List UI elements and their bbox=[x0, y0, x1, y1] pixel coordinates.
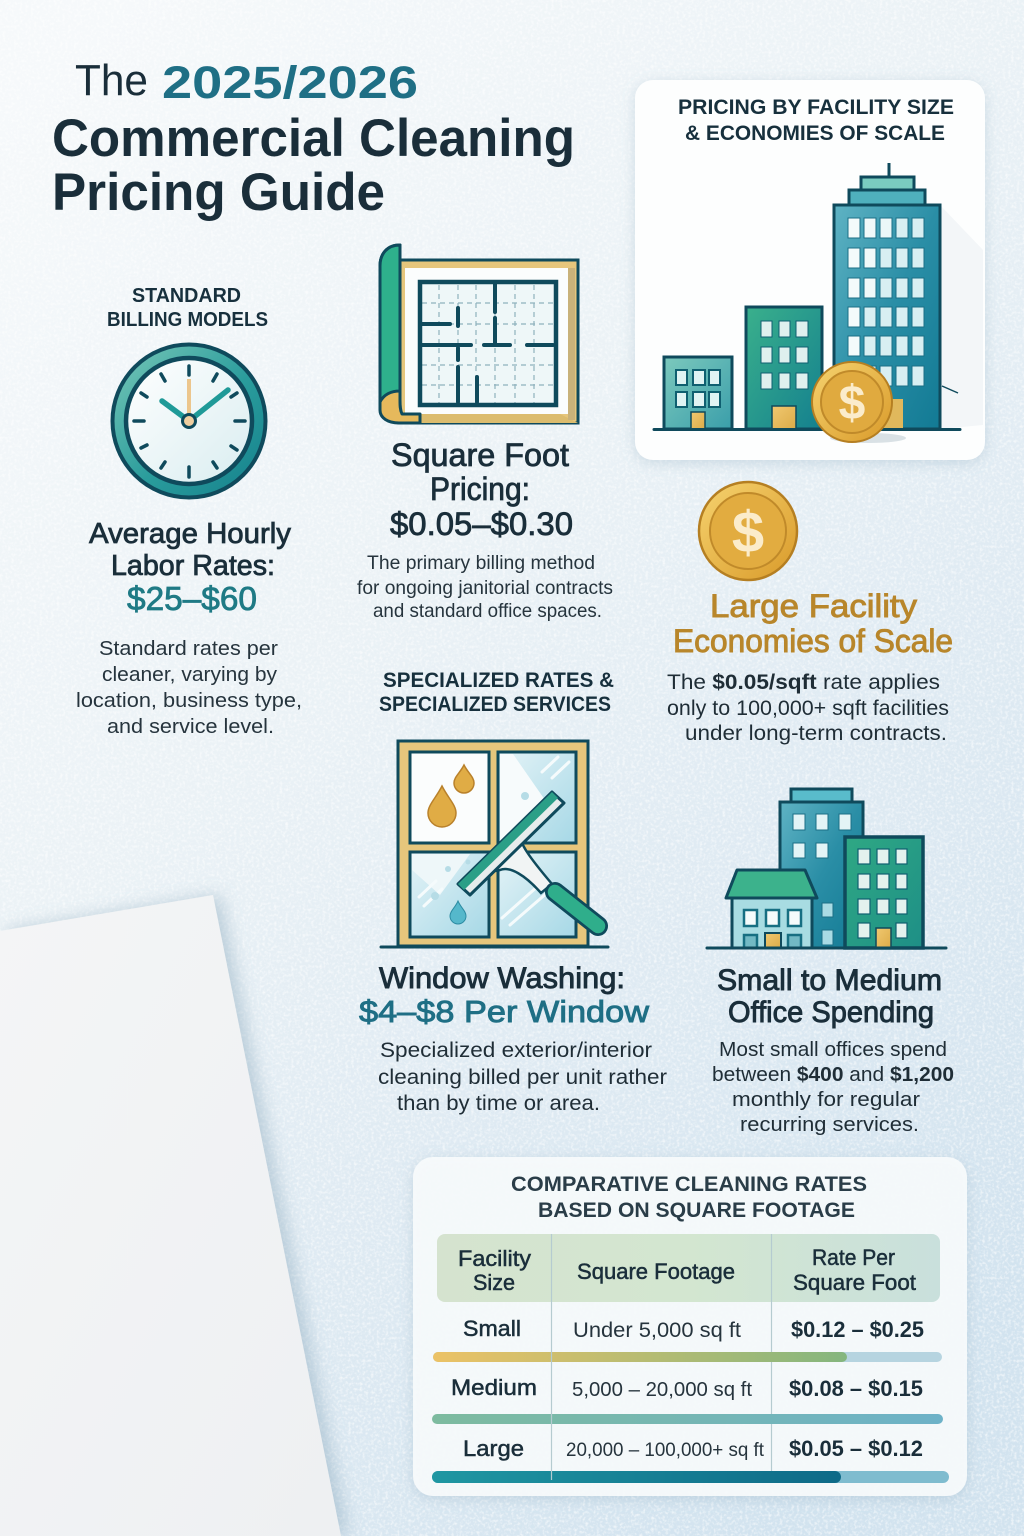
text block: window description: Specialized exterior/interior bbox=[380, 1038, 652, 1062]
heading: specialized rates: SPECIALIZED RATES & bbox=[383, 669, 614, 692]
icon: window and squeegee bbox=[381, 741, 608, 947]
heading: standard billing models bbox=[107, 285, 268, 331]
heading: comparative rates: COMPARATIVE CLEANING RATES bbox=[511, 1172, 867, 1196]
row: medium: 5,000 – 20,000 sq ft bbox=[572, 1379, 752, 1401]
text block: office description: monthly for regular bbox=[732, 1088, 920, 1111]
heading: hourly labor rates: Average Hourly bbox=[89, 518, 291, 550]
heading: facility size bbox=[678, 96, 954, 145]
heading: facility size: & ECONOMIES OF SCALE bbox=[685, 122, 945, 145]
text block: hourly description: location, business type, bbox=[76, 689, 302, 712]
row: medium bbox=[451, 1375, 923, 1401]
heading: hourly labor rates: $25–$60 bbox=[127, 580, 257, 617]
text block: hourly description: cleaner, varying by bbox=[102, 663, 278, 686]
icon: clock bbox=[112, 344, 266, 498]
text block: hourly description: and service level. bbox=[107, 715, 274, 738]
title bbox=[52, 56, 575, 222]
title: The bbox=[75, 56, 148, 105]
heading: specialized rates bbox=[379, 669, 614, 716]
heading: square foot pricing bbox=[390, 437, 573, 542]
panel: square foot pricing bbox=[357, 245, 613, 622]
row: small: $0.12 – $0.25 bbox=[791, 1317, 924, 1342]
row: large: $0.05 – $0.12 bbox=[789, 1436, 923, 1461]
heading: large facility economies of scale: Economies of Scale bbox=[673, 623, 953, 659]
table header: Facility bbox=[458, 1246, 531, 1271]
row bars bbox=[432, 1352, 949, 1483]
heading: square foot pricing: $0.05–$0.30 bbox=[390, 506, 573, 542]
heading: office spending: Small to Medium bbox=[717, 964, 942, 997]
row: medium: Medium bbox=[451, 1375, 537, 1400]
table header: Square Footage bbox=[577, 1259, 735, 1284]
heading: window washing bbox=[359, 962, 650, 1029]
panel: small to medium office spending bbox=[707, 789, 954, 1136]
icon: office buildings bbox=[707, 789, 946, 948]
text block: square foot description: and standard office spaces. bbox=[373, 600, 602, 622]
text block: economies description: The $0.05/sqft rate applies bbox=[667, 670, 940, 694]
row: medium: $0.08 – $0.15 bbox=[789, 1376, 923, 1401]
icon: buildings with coin bbox=[654, 163, 983, 443]
panel: comparison table bbox=[413, 1157, 967, 1496]
table header bbox=[437, 1234, 940, 1302]
heading: standard billing models: BILLING MODELS bbox=[107, 309, 268, 331]
text block: window description: cleaning billed per unit rather bbox=[378, 1065, 667, 1089]
panel: pricing by facility size bbox=[635, 80, 985, 460]
text block: office description: recurring services. bbox=[740, 1113, 919, 1136]
text block: economies description: only to 100,000+ sqft facilities bbox=[667, 696, 949, 720]
title: Pricing Guide bbox=[52, 163, 385, 222]
text block: hourly description bbox=[76, 637, 302, 738]
heading: square foot pricing: Square Foot bbox=[391, 437, 569, 473]
title: Commercial Cleaning bbox=[52, 109, 575, 168]
heading: hourly labor rates: Labor Rates: bbox=[111, 550, 275, 582]
panel: specialized services bbox=[359, 669, 667, 1115]
heading: comparative rates: BASED ON SQUARE FOOTAGE bbox=[538, 1198, 855, 1222]
table header: Square Foot bbox=[793, 1270, 916, 1295]
panel: large facility economies of scale bbox=[667, 482, 953, 745]
icon: blueprint bbox=[380, 245, 578, 423]
paper sheet bbox=[0, 895, 341, 1536]
text block: office description bbox=[712, 1038, 954, 1136]
text block: window description: than by time or area. bbox=[397, 1091, 600, 1115]
text block: hourly description: Standard rates per bbox=[99, 637, 278, 660]
heading: large facility economies of scale: Large Facility bbox=[710, 588, 917, 624]
heading: standard billing models: STANDARD bbox=[132, 285, 241, 307]
text block: square foot description: The primary billing method bbox=[367, 552, 595, 574]
row: large bbox=[463, 1436, 923, 1461]
heading: comparative rates bbox=[511, 1172, 867, 1222]
heading: large facility economies of scale bbox=[673, 588, 953, 659]
panel: standard billing models bbox=[76, 285, 302, 738]
row: large: Large bbox=[463, 1436, 524, 1461]
text block: economies description bbox=[667, 670, 949, 745]
heading: specialized rates: SPECIALIZED SERVICES bbox=[379, 693, 611, 716]
icon: gold coin bbox=[699, 482, 797, 580]
text block: office description: Most small offices spend bbox=[719, 1038, 947, 1061]
row: small: Small bbox=[463, 1316, 521, 1341]
heading: hourly labor rates bbox=[89, 518, 291, 617]
text block: window description bbox=[378, 1038, 667, 1115]
table header: Size bbox=[473, 1270, 515, 1295]
row: small bbox=[463, 1316, 924, 1342]
row: large: 20,000 – 100,000+ sq ft bbox=[566, 1439, 765, 1461]
heading: facility size: PRICING BY FACILITY SIZE bbox=[678, 96, 954, 119]
table header: Rate Per bbox=[812, 1245, 895, 1270]
icon: gold coin: $ bbox=[732, 500, 764, 565]
row: small: Under 5,000 sq ft bbox=[573, 1318, 741, 1342]
heading: office spending: Office Spending bbox=[728, 996, 934, 1029]
text block: office description: between $400 and $1,200 bbox=[712, 1063, 954, 1086]
heading: window washing: $4–$8 Per Window bbox=[359, 994, 650, 1029]
heading: square foot pricing: Pricing: bbox=[430, 471, 530, 507]
text block: economies description: under long-term contracts. bbox=[685, 721, 947, 745]
text block: square foot description bbox=[357, 552, 613, 622]
icon: gold drops bbox=[428, 765, 474, 827]
title: 2025/2026 bbox=[162, 57, 418, 108]
icon: buildings with coin: $ bbox=[839, 377, 866, 430]
heading: office spending bbox=[717, 964, 942, 1029]
text block: square foot description: for ongoing janitorial contracts bbox=[357, 577, 613, 599]
heading: window washing: Window Washing: bbox=[379, 962, 625, 995]
